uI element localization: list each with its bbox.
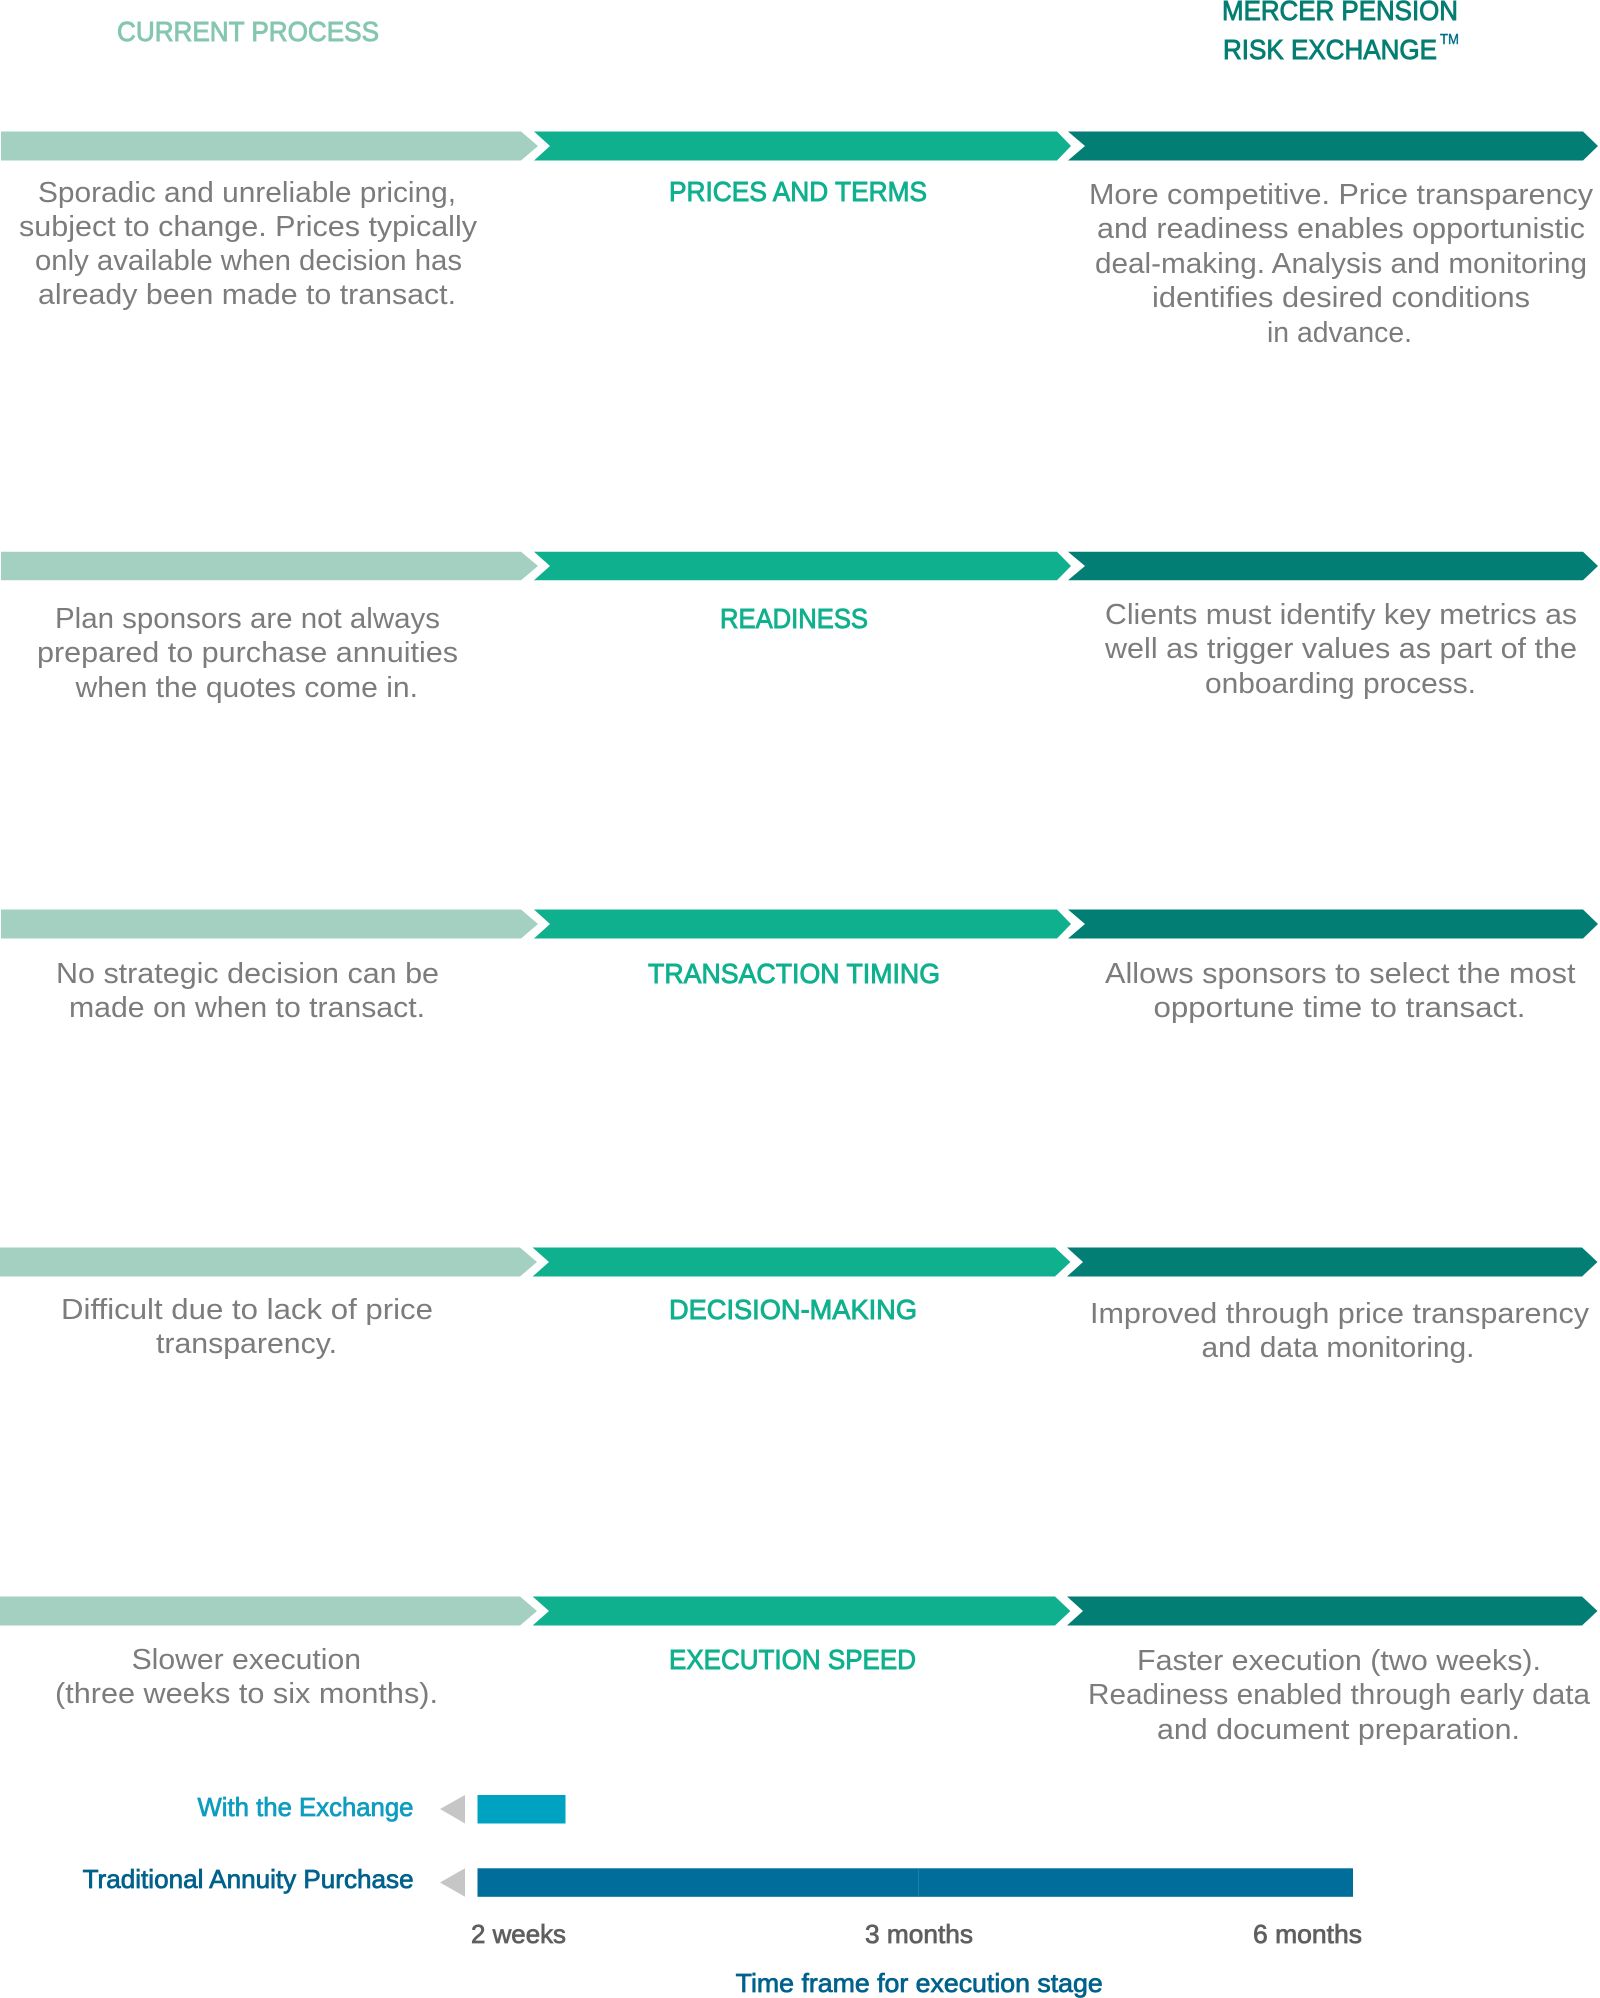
current process text: subject to change. Prices typically (19, 211, 478, 243)
heading: Mercer Pension Risk Exchange: TM (1440, 31, 1459, 48)
heading: Mercer Pension Risk Exchange (1222, 0, 1459, 65)
row: execution speed (0, 1596, 1598, 1746)
current process text: made on when to transact. (69, 992, 425, 1024)
exchange text: Readiness enabled through early data (1088, 1679, 1590, 1711)
axis title: Time frame for execution stage (736, 1968, 1103, 1998)
axis label: 2 weeks: 2 weeks (471, 1919, 566, 1949)
current process text: when the quotes come in. (74, 672, 418, 704)
exchange text: onboarding process. (1205, 668, 1476, 700)
row: readiness (1, 552, 1598, 704)
category label: PRICES AND TERMS (669, 176, 927, 207)
current process text: Slower execution (132, 1644, 361, 1676)
current process text: Plan sponsors are not always (55, 603, 440, 635)
exchange text (1088, 1645, 1590, 1746)
exchange text: Faster execution (two weeks). (1137, 1645, 1541, 1677)
current process text: already been made to transact. (38, 279, 456, 311)
exchange text: Clients must identify key metrics as (1105, 599, 1577, 631)
legend label: with the exchange: With the Exchange (198, 1792, 414, 1822)
exchange text: and readiness enables opportunistic (1097, 213, 1585, 245)
exchange text: identifies desired conditions (1152, 282, 1530, 314)
arrow band (0, 1596, 1598, 1626)
axis label: 3 months: 3 months (865, 1919, 973, 1949)
arrow band (0, 1248, 1598, 1276)
category label: DECISION-MAKING (669, 1294, 917, 1325)
current process text: No strategic decision can be (56, 958, 439, 990)
row: prices and terms (1, 132, 1598, 349)
current process text (55, 1644, 438, 1710)
current process text (37, 603, 458, 704)
exchange text: in advance. (1267, 317, 1412, 349)
exchange text (1090, 1298, 1590, 1364)
heading: current process: CURRENT PROCESS (117, 16, 379, 47)
exchange text (1104, 599, 1577, 700)
current process text: Sporadic and unreliable pricing, (38, 177, 456, 209)
arrow band (1, 552, 1598, 580)
bar: with the exchange (478, 1795, 566, 1824)
category label: READINESS (720, 603, 868, 634)
icon: left triangle, traditional (440, 1868, 465, 1897)
exchange text: and document preparation. (1157, 1714, 1520, 1746)
current process text: transparency. (156, 1328, 337, 1360)
arrow band (1, 910, 1598, 938)
current process text: prepared to purchase annuities (37, 637, 458, 669)
exchange text: Improved through price transparency (1090, 1298, 1590, 1330)
arrow band (1, 132, 1598, 160)
current process text: only available when decision has (35, 245, 462, 277)
exchange text: well as trigger values as part of the (1104, 633, 1577, 665)
icon: left triangle, exchange (440, 1795, 465, 1824)
heading: Mercer Pension Risk Exchange: RISK EXCHANGE (1223, 34, 1437, 65)
current process text (19, 177, 478, 311)
category label: TRANSACTION TIMING (648, 958, 940, 989)
axis label: 6 months: 6 months (1253, 1919, 1362, 1949)
exchange text (1089, 179, 1594, 349)
exchange text: deal-making. Analysis and monitoring (1095, 248, 1587, 280)
exchange text: More competitive. Price transparency (1089, 179, 1594, 211)
current process text: Difficult due to lack of price (61, 1294, 433, 1326)
current process text (56, 958, 439, 1024)
bar: traditional annuity purchase (478, 1868, 1353, 1897)
category label: EXECUTION SPEED (669, 1644, 916, 1675)
current process text (61, 1294, 433, 1360)
exchange text (1105, 958, 1576, 1024)
current process text: (three weeks to six months). (55, 1678, 438, 1710)
row: transaction timing (1, 910, 1598, 1024)
exchange text: Allows sponsors to select the most (1105, 958, 1576, 990)
exchange text: and data monitoring. (1202, 1332, 1474, 1364)
row: decision-making (0, 1248, 1598, 1364)
bar chart: time frame for execution stage (83, 1792, 1362, 1998)
legend label: traditional annuity purchase: Traditional Annuity Purchase (83, 1864, 414, 1894)
exchange text: opportune time to transact. (1154, 992, 1526, 1024)
